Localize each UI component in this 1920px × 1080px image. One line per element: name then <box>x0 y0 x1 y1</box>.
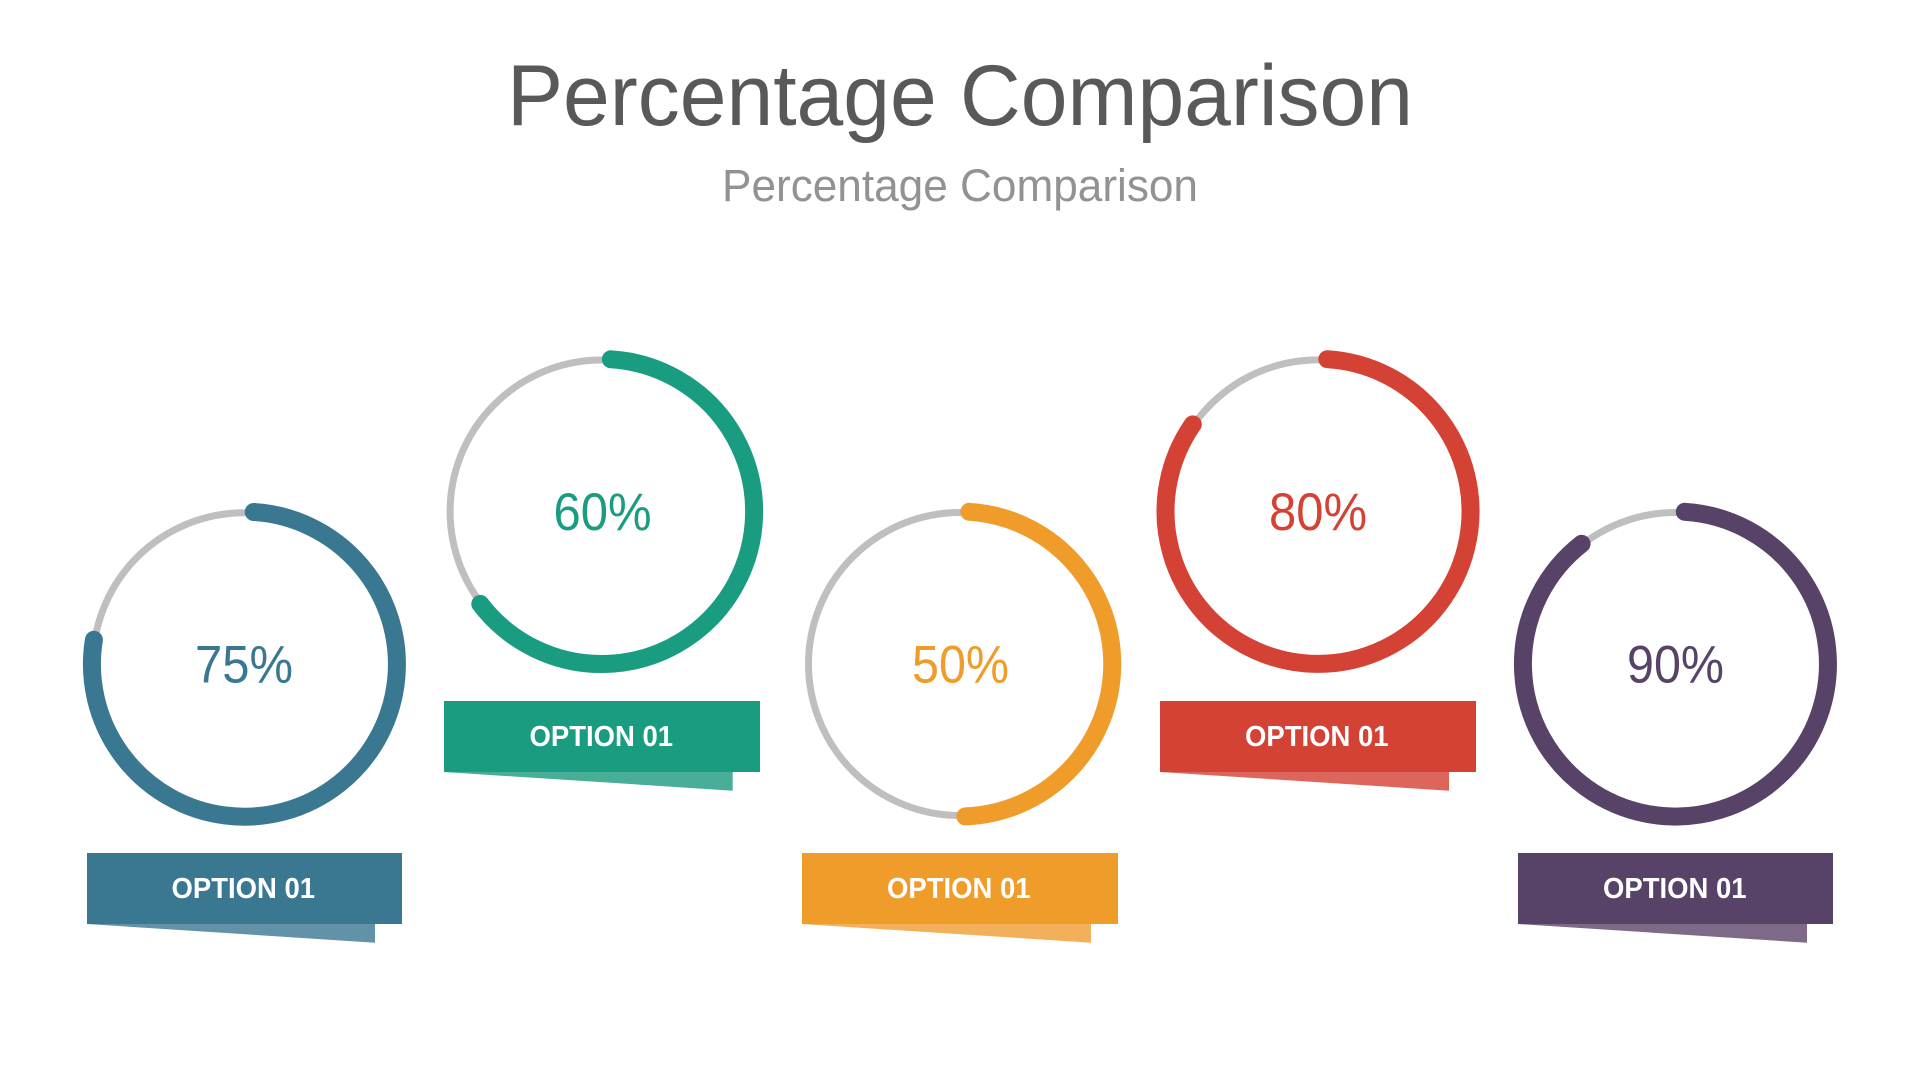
ribbon label: option 01 <box>1518 853 1833 943</box>
panel: option 90% <box>1518 512 1833 943</box>
value: 90%: 90% <box>1627 636 1724 694</box>
ribbon label: option 01 <box>1160 701 1476 791</box>
value: 80%: 80% <box>1269 483 1367 542</box>
subtitle: Percentage Comparison <box>722 160 1198 211</box>
value: 50%: 50% <box>912 636 1009 694</box>
donut gauge: 75% <box>92 512 397 817</box>
ribbon label: option 01: OPTION 01 <box>172 873 315 905</box>
ribbon label: option 01: OPTION 01 <box>887 873 1031 905</box>
ribbon label: option 01 <box>444 701 760 791</box>
panel: option 60% <box>444 359 760 791</box>
value: 60%: 60% <box>554 483 652 542</box>
panel: option 80% <box>1160 359 1476 791</box>
donut gauge: 60% <box>450 359 754 664</box>
ribbon label: option 01 <box>87 853 402 943</box>
panel: option 75% <box>87 512 402 943</box>
ribbon label: option 01: OPTION 01 <box>1245 721 1389 753</box>
panel: option 50% <box>802 512 1118 943</box>
ribbon label: option 01: OPTION 01 <box>530 721 673 753</box>
donut gauge: 80% <box>1166 359 1471 664</box>
donut gauge: 90% <box>1523 512 1828 817</box>
donut gauge: 50% <box>808 512 1112 816</box>
ribbon label: option 01 <box>802 853 1118 943</box>
ribbon label: option 01: OPTION 01 <box>1603 873 1747 905</box>
title: Percentage Comparison <box>507 48 1413 144</box>
value: 75%: 75% <box>195 636 293 694</box>
